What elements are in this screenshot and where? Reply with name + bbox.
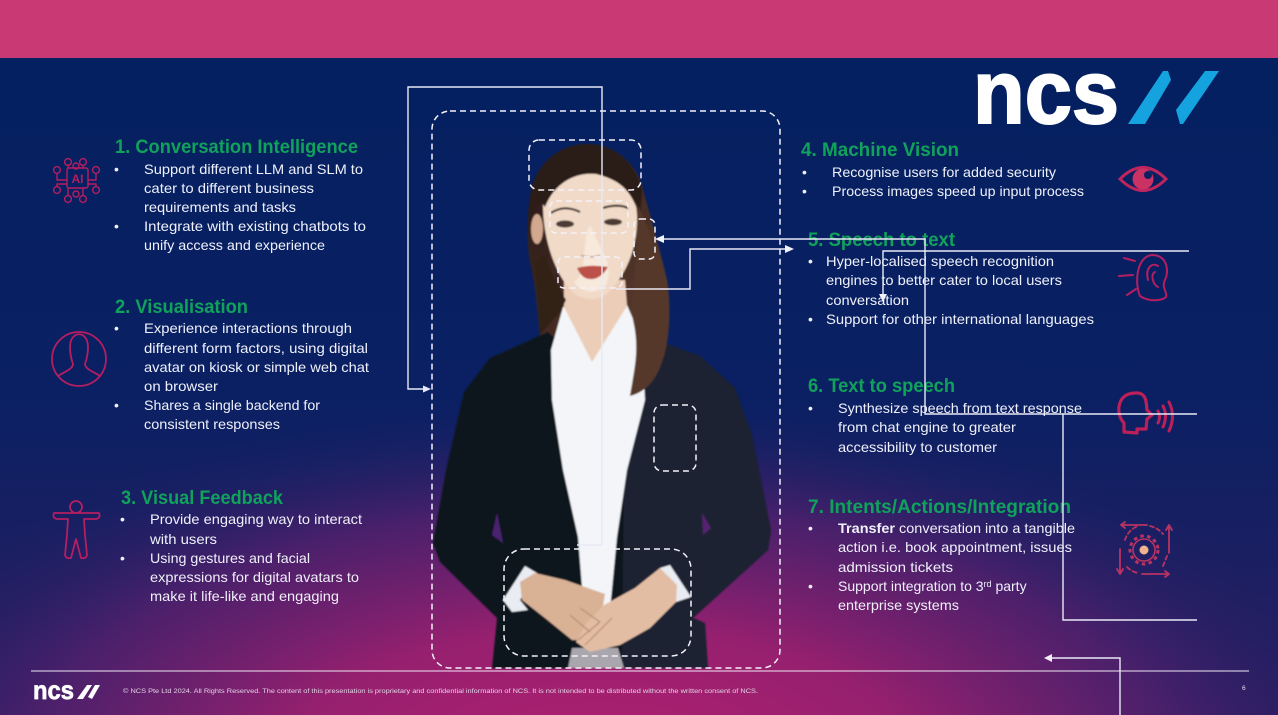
dashed box: eyes [550,201,628,233]
heading and text: 1. Conversation Intelligence: 1. Conversation Intelligence [115,137,358,158]
heading and text: 7. Intents/Actions/Integration: • [808,520,813,536]
heading and text: 5. Speech to text [808,230,1094,327]
heading and text: 5. Speech to text: 5. Speech to text [808,230,956,251]
shirt [551,305,645,610]
dashed box: hair [529,140,641,190]
heading and text: 1. Conversation Intelligence: requirements and tasks [144,199,296,215]
heading and text: 1. Conversation Intelligence [114,137,366,253]
heading and text: 4. Machine Vision: Process images speed up input process [832,183,1084,199]
icon: AI chip network [54,159,99,202]
arrow: speech input to ear [655,235,1197,414]
icon: speaking head [1119,393,1172,433]
heading and text: 7. Intents/Actions/Integration [808,497,1075,613]
mouth [577,266,608,279]
heading and text: 5. Speech to text: engines to better cater to local users [826,272,1062,288]
heading and text: 3. Visual Feedback: Provide engaging way to interact [150,511,362,527]
heading and text: 2. Visualisation: consistent responses [144,416,280,432]
arrow: bottom connector [1044,654,1120,715]
hair back [528,144,669,362]
heading and text: 5. Speech to text: • [808,253,813,269]
ear [531,214,543,244]
icon: gear with cycle arrows [1117,522,1172,577]
footer logo: ncs [33,675,74,705]
heading and text: 6. Text to speech: • [808,400,813,416]
icon: eye [1120,168,1166,190]
arrow: conversation intelligence connector to body [408,87,602,545]
icon: AI chip network: AI [72,172,84,186]
heading and text: 3. Visual Feedback [120,488,362,604]
top banner [0,0,1278,58]
heading and text: 2. Visualisation: • [114,397,119,413]
heading and text: 7. Intents/Actions/Integration: Transfer conversation into a tangible [838,520,1075,536]
heading and text: 2. Visualisation: • [114,320,119,336]
heading and text: 3. Visual Feedback: • [120,511,125,527]
heading and text: 1. Conversation Intelligence: • [114,218,119,234]
footer copyright: © NCS Pte Ltd 2024. All Rights Reserved. The content of this presentation is proprietary and confidential information of NCS. It is not intended to be distributed without the written consent of NCS. [123,688,758,695]
arrow: ear line to speech text [879,251,1189,302]
heading and text: 1. Conversation Intelligence: Support different LLM and SLM to [144,161,363,177]
heading and text: 6. Text to speech: Synthesize speech from text response [838,400,1082,416]
heading and text: 3. Visual Feedback: 3. Visual Feedback [121,488,283,509]
heading and text: 4. Machine Vision: 4. Machine Vision [801,140,959,161]
heading and text: 4. Machine Vision: • [802,183,807,199]
heading and text: 3. Visual Feedback: expressions for digital avatars to [150,569,359,585]
connector: actions [1063,414,1197,620]
heading and text: 1. Conversation Intelligence: Integrate with existing chatbots to [144,218,366,234]
heading and text: 7. Intents/Actions/Integration: Support integration to 3 [838,578,984,594]
NCS logo: ncs [973,43,1119,143]
neck [564,280,627,362]
heading and text: 2. Visualisation: different form factors, using digital [144,340,368,356]
heading and text: 4. Machine Vision: • [802,164,807,180]
finger lines [570,608,612,645]
heading and text: 7. Intents/Actions/Integration: rd [984,579,992,589]
heading and text: 2. Visualisation: Experience interactions through [144,320,352,336]
heading and text: 4. Machine Vision [801,140,1084,199]
heading and text: 1. Conversation Intelligence: cater to different business [144,180,314,196]
heading and text: 6. Text to speech: accessibility to customer [838,439,997,455]
heading and text: 2. Visualisation: on browser [144,378,218,394]
cuffs [503,566,537,612]
right hair strand over jacket [630,205,669,396]
heading and text: 5. Speech to text: • [808,311,813,327]
heading and text: 2. Visualisation: avatar on kiosk or simple web chat [144,359,369,375]
left hair strand [534,255,566,335]
hair fringe [536,144,642,218]
heading and text: 4. Machine Vision: Recognise users for added security [832,164,1056,180]
footer logo [33,675,100,705]
dashed box: hands [504,549,691,656]
arrow: mouth to speech [616,245,794,289]
heading and text: 2. Visualisation [114,297,369,432]
heading and text: 6. Text to speech: from chat engine to greater [838,419,1016,435]
heading and text: 1. Conversation Intelligence: • [114,161,119,177]
heading and text: 6. Text to speech: 6. Text to speech [808,376,955,397]
nose shadow [581,255,600,257]
avatar: digital woman [433,144,771,668]
NCS logo [973,43,1219,143]
dashed box: ear [634,219,655,259]
heading and text: 3. Visual Feedback: with users [149,531,217,547]
heading and text: 7. Intents/Actions/Integration: enterprise systems [838,597,959,613]
heading and text: 1. Conversation Intelligence: unify access and experience [144,237,325,253]
heading and text: 3. Visual Feedback: make it life-like and engaging [150,588,339,604]
heading and text: 7. Intents/Actions/Integration: admission tickets [838,559,953,575]
heading and text: 5. Speech to text: Hyper-localised speech recognition [826,253,1054,269]
heading and text: 3. Visual Feedback: Using gestures and facial [150,550,310,566]
heading and text: 2. Visualisation: Shares a single backend for [144,397,320,413]
skirt [568,648,624,668]
arm gaps [492,513,503,543]
icon: ear with sound lines [1119,255,1167,300]
page number: 6 [1242,685,1246,692]
jacket [433,332,771,668]
dashed box: chest [654,405,696,471]
eyes and brows [551,208,580,213]
dashed box: full body [432,111,780,668]
heading and text: 7. Intents/Actions/Integration: • [808,578,813,594]
heading and text: 7. Intents/Actions/Integration: 7. Intents/Actions/Integration [808,497,1071,518]
heading and text: 5. Speech to text: conversation [826,292,909,308]
heading and text: 7. Intents/Actions/Integration: action i.e. book appointment, issues [838,539,1072,555]
icon: user in circle [52,332,106,386]
face [543,172,637,299]
heading and text: 6. Text to speech [808,376,1082,455]
dashed box: mouth [558,257,622,288]
heading and text: 7. Intents/Actions/Integration: party [992,578,1027,594]
heading and text: 3. Visual Feedback: • [120,550,125,566]
hands [520,573,605,640]
icon: standing human figure [53,501,100,558]
heading and text: 2. Visualisation: 2. Visualisation [115,297,248,318]
footer rule [31,670,1249,672]
heading and text: 5. Speech to text: Support for other international languages [826,311,1094,327]
